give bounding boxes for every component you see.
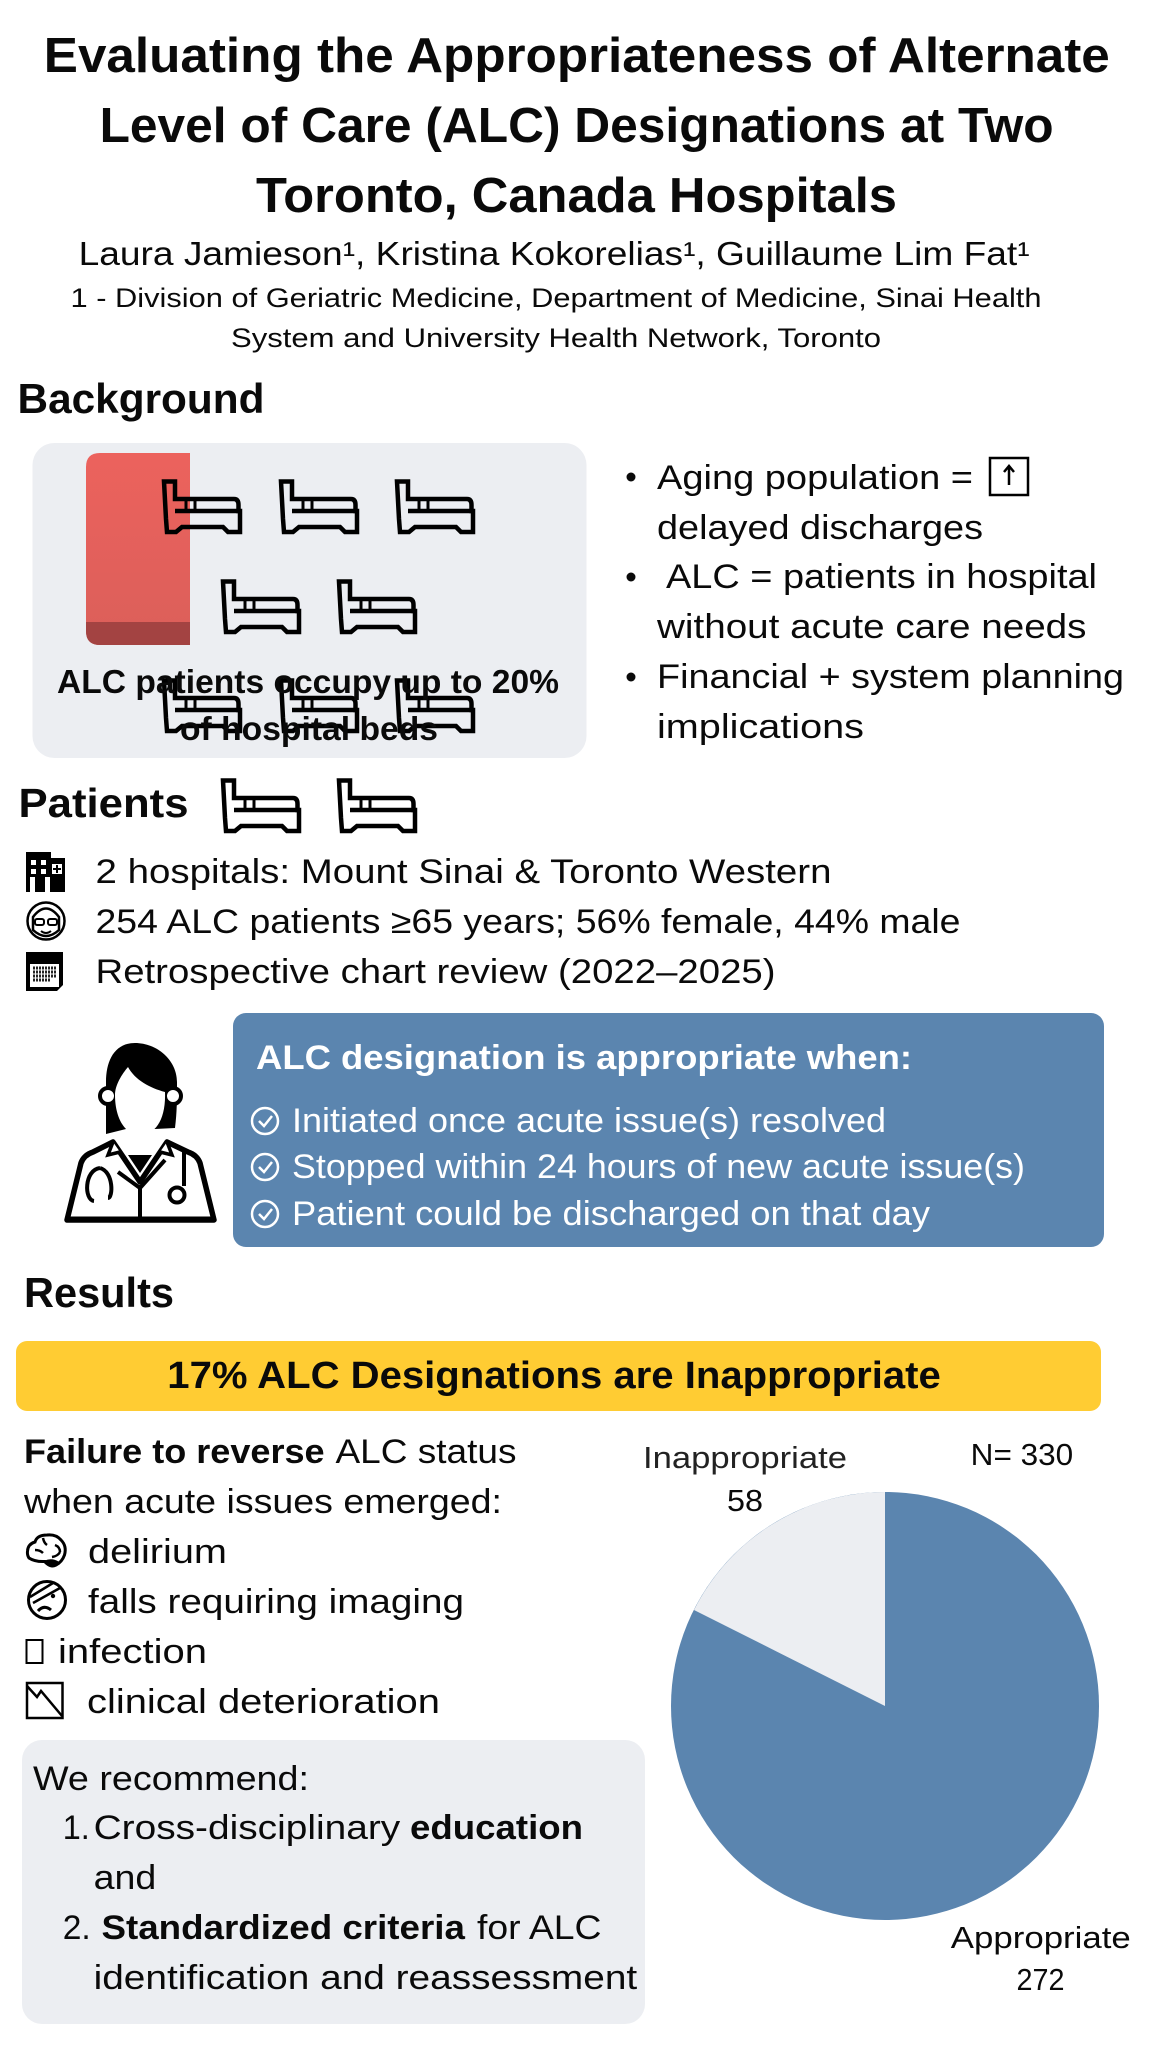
recommendation 1: Cross-disciplinary: [94, 1809, 400, 1847]
heading: background: Background: [18, 375, 264, 422]
icon: hospital: [26, 852, 65, 892]
panel caption: ALC patients occupy up to 20%: [57, 663, 559, 700]
pie label: inappropriate: [643, 1440, 847, 1518]
background bullets: without acute care needs: [656, 608, 1086, 646]
recommendation 2: 2.: [63, 1909, 91, 1947]
panel: recommendations: We recommend:: [33, 1760, 309, 1798]
icon: brain: [27, 1535, 65, 1566]
recommendation 1: 1.: [63, 1809, 90, 1847]
recommendation 2: for ALC: [477, 1909, 602, 1947]
recommendation 2: Standardized criteria: [102, 1909, 466, 1947]
pie label: appropriate: [951, 1920, 1131, 1997]
text: failure to reverse: [23, 1433, 516, 1521]
affiliation: [70, 283, 1042, 353]
heading: patients: Patients: [18, 780, 188, 826]
background bullets: Aging population =: [657, 459, 973, 497]
bed icons: [164, 482, 473, 731]
pie chart: [643, 1437, 1131, 1997]
pie label: inappropriate: Inappropriate: [643, 1440, 847, 1475]
criterion 2: Stopped within 24 hours of new acute issue(s): [292, 1148, 1025, 1186]
recommendation 1: education: [410, 1809, 583, 1847]
text: falls: falls requiring imaging: [88, 1583, 464, 1621]
criterion 1: Initiated once acute issue(s) resolved: [292, 1102, 886, 1140]
icon: bandaged face: [28, 1582, 66, 1618]
icon: calendar: [26, 952, 63, 991]
pie label: appropriate: Appropriate: [951, 1920, 1131, 1955]
icon: doctor: [65, 1043, 216, 1220]
banner: 17% inappropriate: [16, 1341, 1101, 1411]
heading: results: Results: [24, 1269, 174, 1316]
text: failure to reverse: ALC status: [336, 1433, 516, 1471]
text: failure to reverse: when acute issues emerged:: [23, 1483, 502, 1521]
text: ALC patients: 254 ALC patients ≥65 years; 56% female, 44% male: [96, 903, 960, 941]
icon: older woman face: [28, 902, 64, 940]
panel heading: ALC designation is appropriate when:: [256, 1039, 912, 1077]
text: infection: infection: [58, 1633, 207, 1671]
affiliation: System and University Health Network, Toronto: [231, 323, 881, 353]
panel: recommendations: [22, 1740, 645, 2024]
affiliation: 1 - Division of Geriatric Medicine, Department of Medicine, Sinai Health: [70, 283, 1042, 313]
panel caption: [57, 663, 559, 747]
pie label: inappropriate: 58: [727, 1483, 763, 1518]
recommendation 1: [63, 1809, 583, 1897]
recommendation 2: [63, 1909, 638, 1997]
text: chart review: Retrospective chart review (2022–2025): [96, 953, 776, 991]
pie total: N= 330: [971, 1437, 1073, 1472]
banner: 17% inappropriate: 17% ALC Designations are Inappropriate: [167, 1355, 941, 1397]
icon: decline chart: [27, 1683, 62, 1718]
icon: up arrow box: [990, 458, 1028, 495]
panel: ALC bed occupancy: [32, 443, 586, 758]
criterion 3: Patient could be discharged on that day: [292, 1195, 930, 1233]
background bullets: delayed discharges: [657, 509, 983, 547]
background bullets: Financial + system planning: [657, 658, 1124, 696]
authors: Laura Jamieson¹, Kristina Kokorelias¹, Guillaume Lim Fat¹: [79, 235, 1030, 272]
icon: missing glyph box: [26, 1640, 42, 1663]
panel caption: of hospital beds: [180, 710, 438, 747]
panel: ALC designation criteria: [233, 1013, 1104, 1247]
title: Level of Care (ALC) Designations at Two: [100, 99, 1054, 153]
pie label: appropriate: 272: [1016, 1962, 1064, 1997]
recommendation 1: and: [94, 1859, 156, 1897]
text: failure to reverse: Failure to reverse: [24, 1433, 325, 1471]
icon: beds beside patients: [223, 780, 415, 831]
title: [44, 29, 1110, 223]
recommendation 2: identification and reassessment: [94, 1959, 638, 1997]
text: hospitals: 2 hospitals: Mount Sinai & Toronto Western: [96, 853, 831, 891]
title: Toronto, Canada Hospitals: [256, 169, 897, 223]
text: delirium: delirium: [88, 1533, 227, 1571]
background bullets: [626, 458, 1124, 746]
title: Evaluating the Appropriateness of Alternate: [44, 29, 1110, 83]
text: clinical deterioration: clinical deterioration: [87, 1683, 440, 1721]
red bar: [86, 453, 190, 645]
background bullets: ALC = patients in hospital: [666, 558, 1097, 596]
background bullets: implications: [657, 708, 864, 746]
